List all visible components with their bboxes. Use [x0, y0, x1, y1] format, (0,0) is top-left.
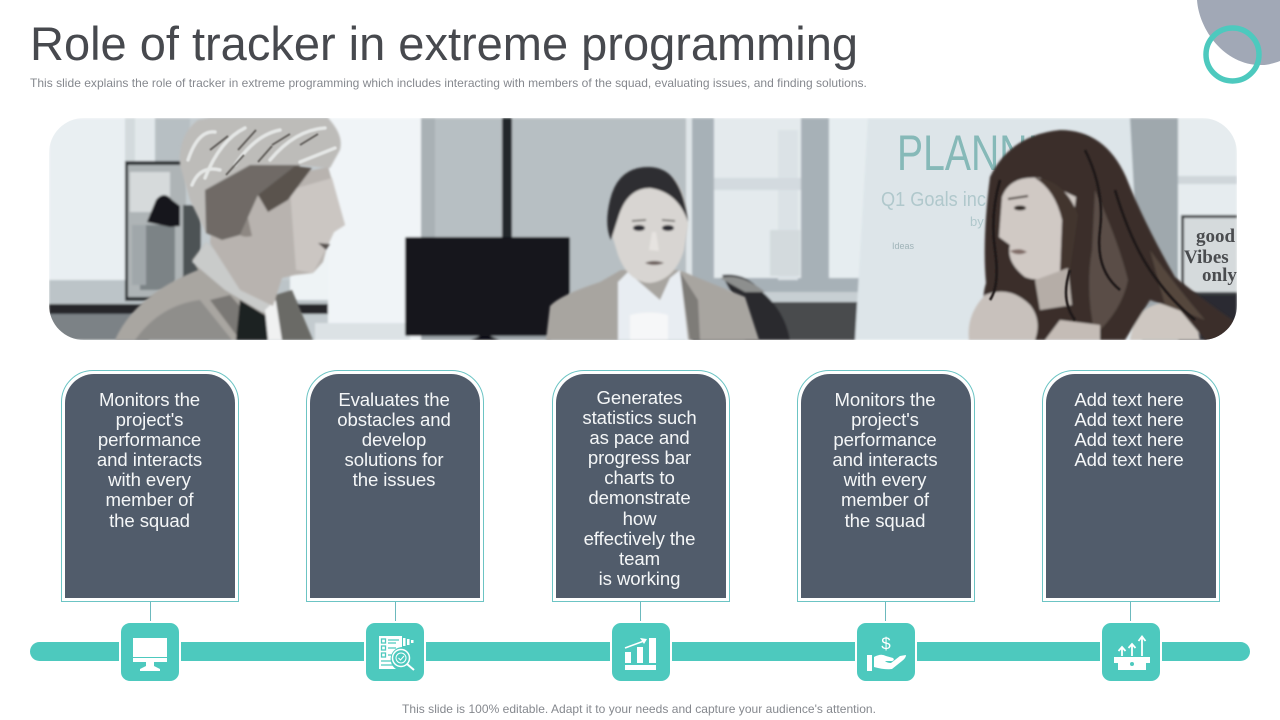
card 3 text: how: [623, 508, 656, 529]
panel: card 4: [797, 370, 975, 602]
card 2 text: Evaluates the: [338, 389, 450, 410]
card 1 text: [97, 389, 202, 531]
whiteboard handwriting (real text): [882, 135, 1090, 249]
icon: monitor: [119, 621, 181, 683]
card 3 text: is working: [599, 568, 680, 589]
connector 1: [150, 602, 151, 623]
middle woman: [546, 270, 759, 340]
card 1 text: with every: [108, 469, 191, 490]
card 2 text: develop: [362, 429, 426, 450]
card 3 text: Generates: [597, 387, 682, 408]
icon: checklist and magnifier: [364, 621, 426, 683]
right woman: [1130, 303, 1200, 340]
card 1 fill: [65, 374, 235, 598]
card 5 fill: [1046, 374, 1216, 598]
whiteboard handwriting (real text): PLANNING: [897, 125, 1097, 181]
subtitle: This slide explains the role of tracker in extreme programming which includes interacting with members of the squad, evaluating issues, and finding solutions.: [30, 76, 867, 90]
footer note: This slide is 100% editable. Adapt it to your needs and capture your audience's attention.: [402, 702, 876, 716]
card 5 text: Add text here: [1074, 409, 1184, 430]
poster lettering: only: [1202, 265, 1237, 286]
card 4 text: Monitors the: [834, 389, 936, 410]
whiteboard handwriting (real text): by: [970, 214, 984, 229]
panel: card 3: [552, 370, 730, 602]
connector 3: [640, 602, 641, 623]
card 2 text: [337, 389, 451, 490]
poster lettering: Vibes: [1184, 247, 1229, 268]
card 4 text: [832, 389, 938, 531]
whiteboard handwriting (real text): Ideas: [892, 241, 915, 251]
title: Role of tracker in extreme programming: [30, 17, 858, 70]
decoration: grey corner blob: [1197, 0, 1280, 65]
connector 5: [1130, 602, 1131, 623]
card 5 text: Add text here: [1074, 429, 1184, 450]
card 4 text: performance: [833, 429, 937, 450]
card 2 text: solutions for: [345, 449, 443, 470]
card 2 text: obstacles and: [337, 409, 451, 430]
card 2 text: the issues: [353, 469, 435, 490]
card 4 fill: [801, 374, 971, 598]
card 1 text: member of: [106, 489, 193, 510]
card 3 text: effectively the: [584, 528, 695, 549]
poster lettering: good: [1196, 226, 1236, 247]
card 1 text: the squad: [109, 510, 190, 531]
card 3 text: [582, 387, 697, 589]
card 3 fill: [556, 374, 726, 598]
card 3 text: charts to: [604, 467, 675, 488]
card 1 text: project's: [116, 409, 183, 430]
decoration: teal ring: [1203, 25, 1262, 84]
card 5 text: [1074, 389, 1184, 470]
icon: box with growth arrows: [1100, 621, 1162, 683]
card 1 text: performance: [98, 429, 201, 450]
whiteboard handwriting (real text): Q1 Goals inc: [881, 189, 986, 211]
connector 4: [885, 602, 886, 623]
card 4 text: with every: [844, 469, 926, 490]
card 4 text: member of: [841, 489, 929, 510]
card 3 text: progress bar: [588, 447, 691, 468]
card 3 text: as pace and: [589, 427, 690, 448]
card 5 text: Add text here: [1074, 389, 1184, 410]
card 3 text: statistics such: [582, 407, 697, 428]
photo: three colleagues in a planning meeting: [49, 118, 1237, 340]
man: [115, 249, 266, 340]
card 3 text: demonstrate: [588, 487, 691, 508]
card 1 text: and interacts: [97, 449, 202, 470]
icon: hand with dollar: $: [881, 634, 891, 653]
icon: hand with dollar: [855, 621, 917, 683]
panel: card 2: [306, 370, 484, 602]
card 4 text: the squad: [845, 510, 925, 531]
card 4 text: and interacts: [832, 449, 938, 470]
card 5 text: Add text here: [1074, 449, 1184, 470]
panel: card 5: [1042, 370, 1220, 602]
card 4 text: project's: [851, 409, 919, 430]
panel: card 1: [61, 370, 239, 602]
connector 2: [395, 602, 396, 623]
card 2 fill: [310, 374, 480, 598]
card 3 text: team: [619, 548, 660, 569]
icon: rising bar chart: [610, 621, 672, 683]
timeline bar: [30, 642, 1250, 661]
card 1 text: Monitors the: [99, 389, 200, 410]
poster lettering: [1184, 226, 1237, 286]
